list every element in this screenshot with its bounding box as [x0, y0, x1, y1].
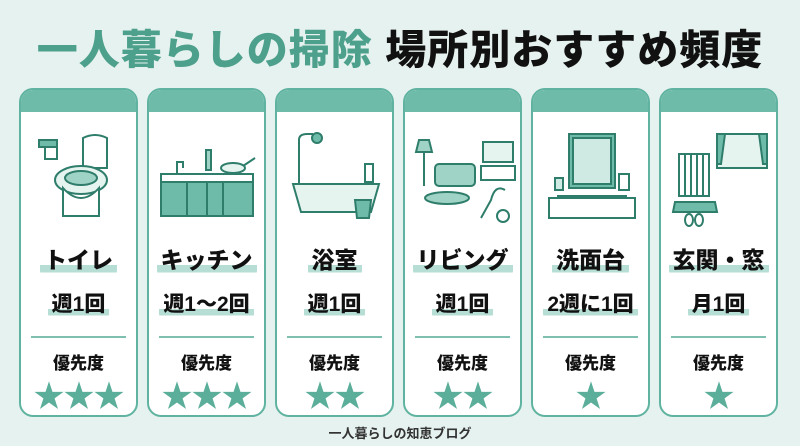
- icon: living room: [414, 139, 516, 223]
- name: キッチン: [160, 247, 252, 273]
- panel: bath: [275, 88, 394, 417]
- priority: 優先度: [309, 354, 360, 373]
- priority: 優先度: [693, 354, 744, 373]
- frequency: 2週に1回: [547, 293, 634, 316]
- icon: toilet: [38, 134, 108, 217]
- priority: 優先度: [565, 354, 616, 373]
- name: 洗面台: [556, 247, 625, 273]
- name: トイレ: [44, 247, 113, 273]
- icon: washbasin: [548, 133, 636, 219]
- priority: 優先度: [181, 354, 232, 373]
- panel: kitchen: [147, 88, 266, 417]
- panel: living: ★★: [432, 379, 492, 414]
- panel: washbasin: ★: [576, 379, 606, 414]
- title: 一人暮らしの掃除 場所別おすすめ頻度: [37, 27, 763, 73]
- frequency: 週1回: [52, 293, 105, 316]
- icon: kitchen: [160, 149, 256, 217]
- panel: living: [403, 88, 522, 417]
- panel: toilet: ★★★: [34, 379, 124, 414]
- name: 玄関・窓: [672, 247, 764, 273]
- name: 浴室: [312, 247, 358, 273]
- panel: entrance & window: ★: [704, 379, 734, 414]
- priority: 優先度: [53, 354, 104, 373]
- frequency: 週1回: [308, 293, 361, 316]
- frequency: 週1回: [436, 293, 489, 316]
- icon: bathtub: [292, 132, 380, 219]
- panel: toilet: [19, 88, 138, 417]
- icon: door and window: [672, 133, 768, 227]
- panel: entrance & window: [659, 88, 778, 417]
- frequency: 月1回: [692, 293, 745, 316]
- frequency: 週1〜2回: [163, 293, 250, 316]
- panel: bath: ★★: [304, 379, 364, 414]
- footer credit: 一人暮らしの知恵ブログ: [328, 426, 472, 441]
- name: リビング: [416, 247, 508, 273]
- panel: washbasin: [531, 88, 650, 417]
- panel: kitchen: ★★★: [162, 379, 252, 414]
- priority: 優先度: [437, 354, 488, 373]
